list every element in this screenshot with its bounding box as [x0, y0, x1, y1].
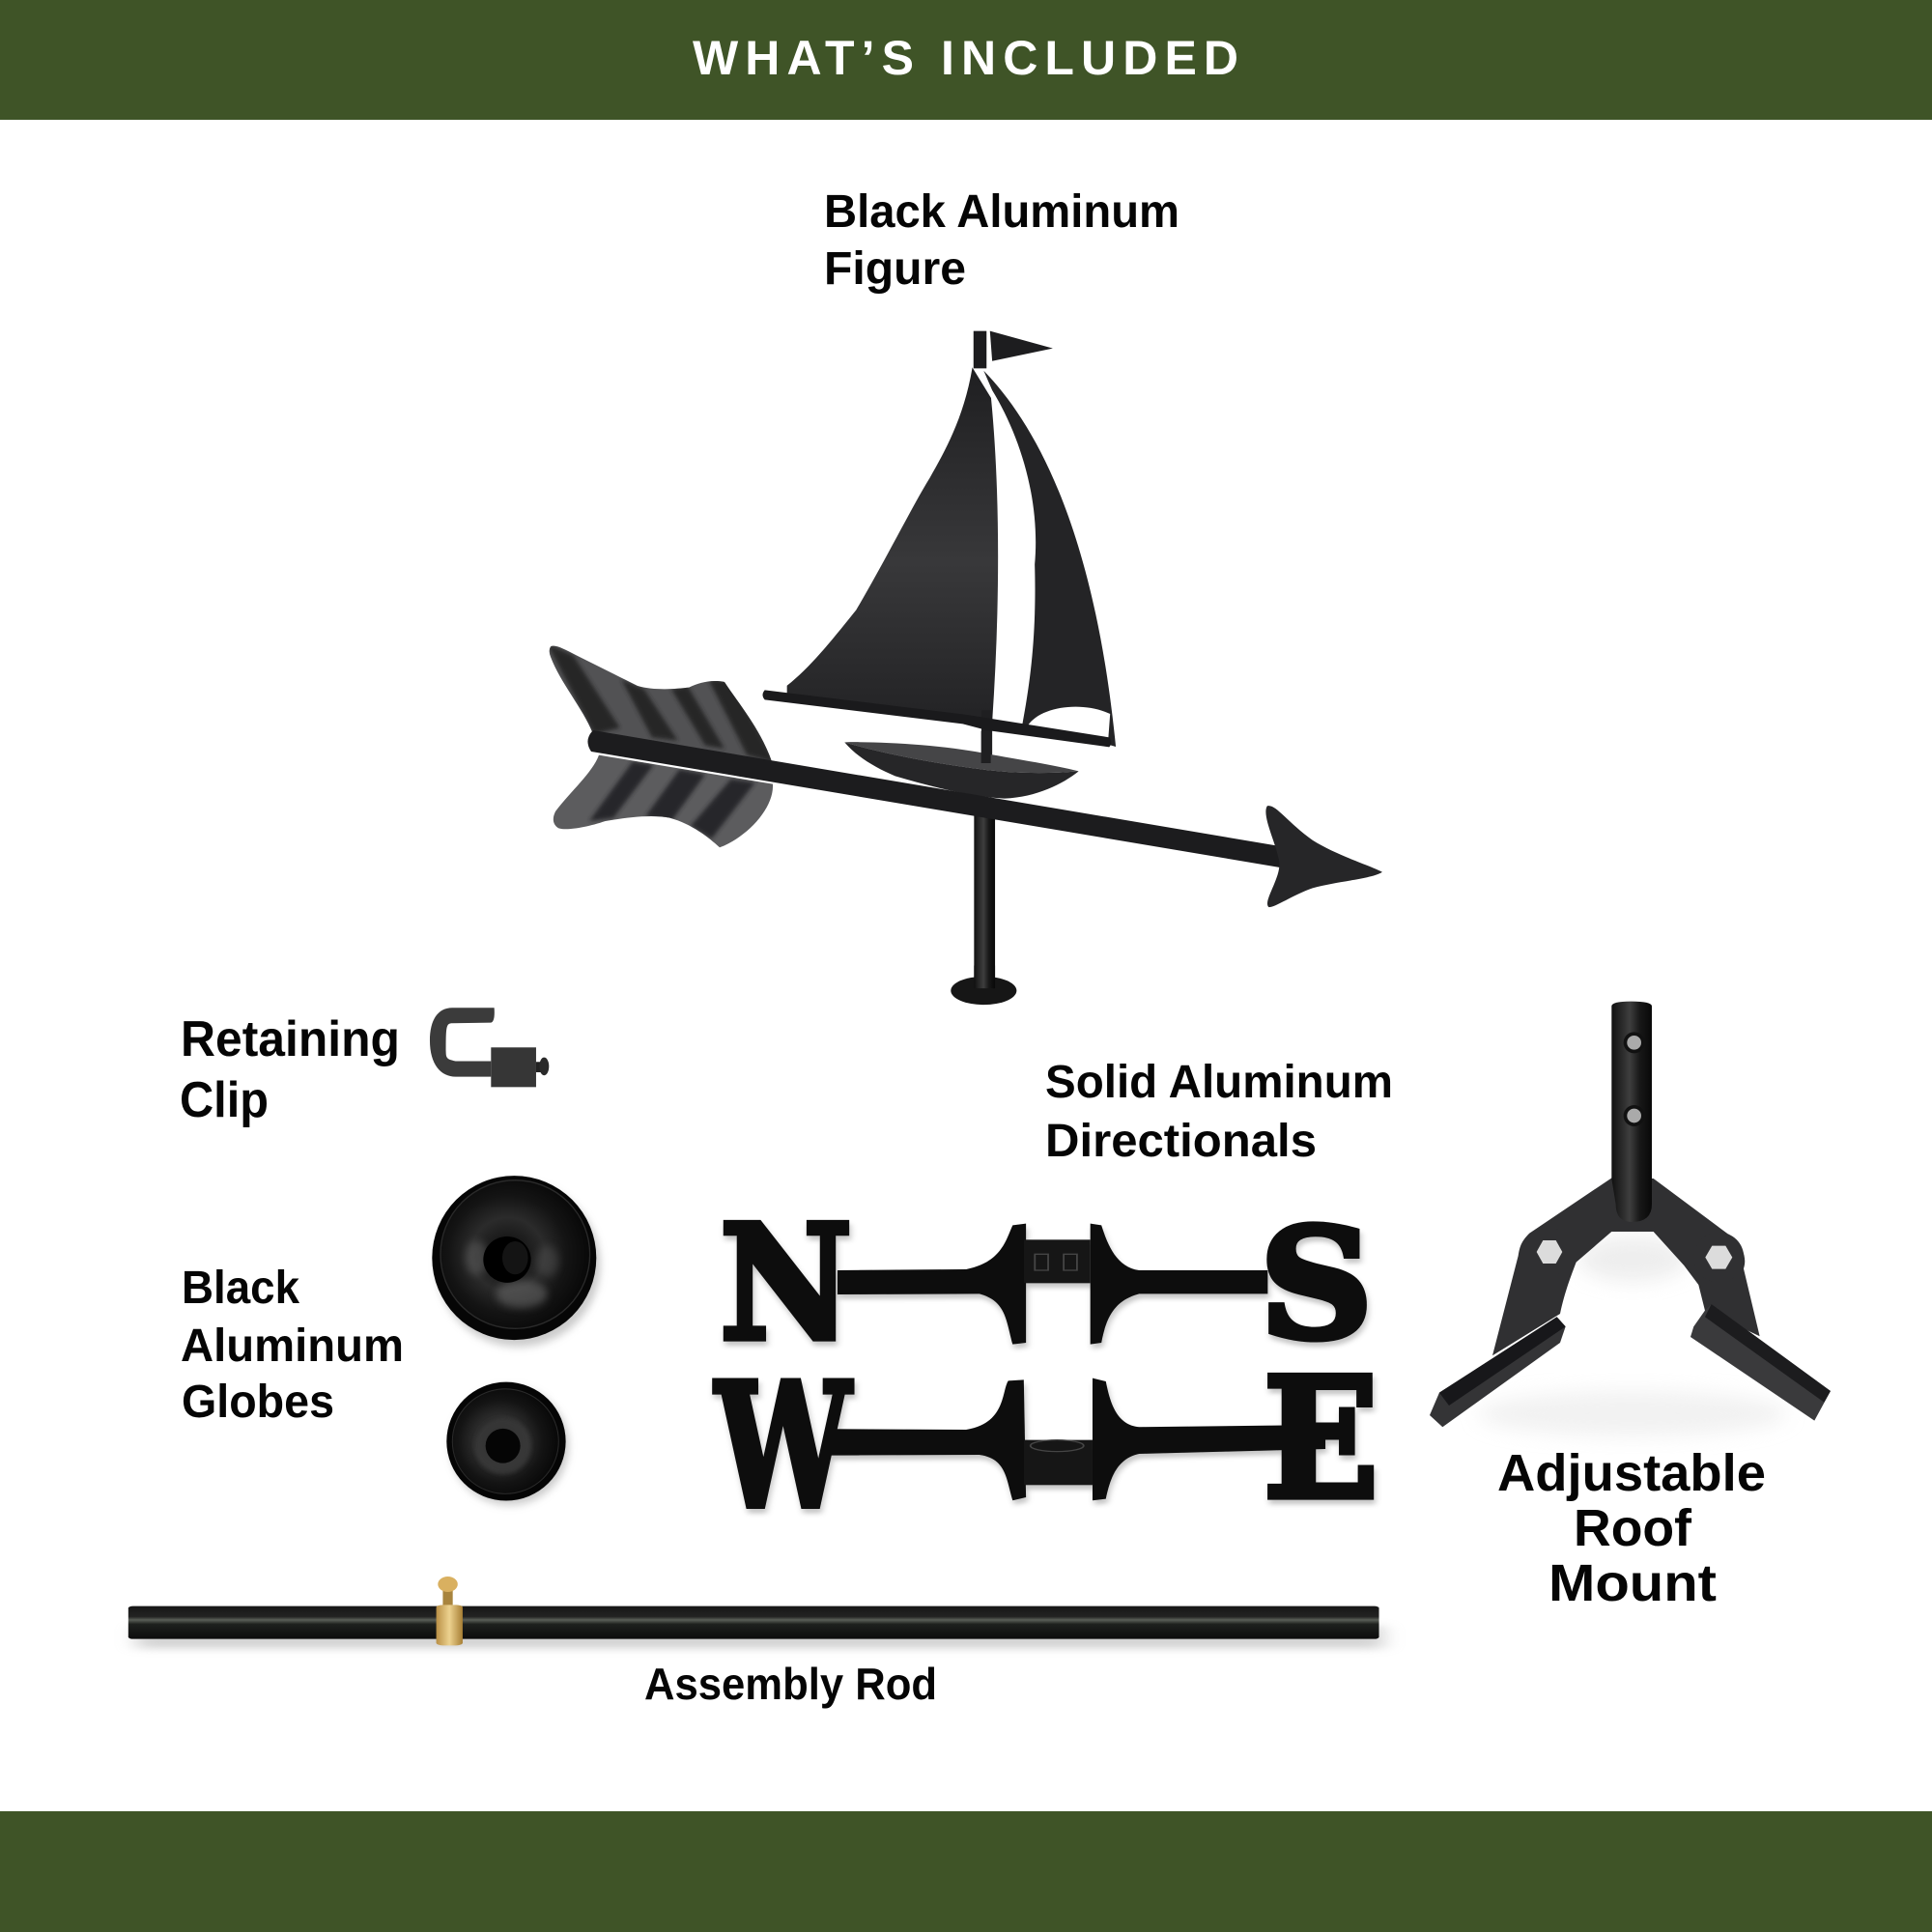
icon: north-south directional	[720, 1190, 1373, 1376]
jib sail	[983, 371, 1116, 747]
title: WHAT’S INCLUDED	[693, 31, 1238, 85]
mount left foot	[1430, 1317, 1566, 1427]
label: adjustable roof mount	[1497, 1444, 1766, 1612]
support post	[951, 810, 1016, 1005]
label: black aluminum globes: Aluminum	[181, 1321, 404, 1372]
label: adjustable roof mount: Adjustable	[1497, 1444, 1766, 1502]
mount stem	[1611, 1002, 1652, 1222]
label: black aluminum figure: Black Aluminum	[824, 186, 1179, 238]
mount right foot	[1690, 1304, 1831, 1421]
mainsail	[787, 367, 998, 722]
mount bracket arms	[1492, 1177, 1760, 1355]
letter N: N	[720, 1190, 852, 1376]
label: black aluminum globes: Globes	[182, 1377, 334, 1428]
header band	[0, 0, 1932, 120]
icon: sailboat weathervane figure	[548, 331, 1382, 1005]
mount shadow	[1478, 1236, 1787, 1436]
label: retaining clip	[180, 1011, 400, 1128]
label: adjustable roof mount: Roof	[1574, 1499, 1692, 1557]
label: solid aluminum directionals	[1045, 1057, 1393, 1167]
label: black aluminum figure	[824, 186, 1179, 295]
mount bolts	[1525, 1228, 1744, 1283]
mast lower	[981, 710, 992, 767]
icon: west-east directional	[714, 1341, 1378, 1547]
flag and mast top	[974, 331, 1053, 368]
label: adjustable roof mount: Mount	[1548, 1554, 1717, 1612]
icon: adjustable roof mount	[1430, 1002, 1831, 1436]
footer band	[0, 1811, 1932, 1932]
icon: assembly rod	[128, 1577, 1383, 1649]
icon: small globe	[446, 1382, 569, 1505]
boom	[762, 690, 1111, 747]
letter S: S	[1260, 1196, 1373, 1373]
label: black aluminum globes: Black	[182, 1263, 299, 1314]
arrow tail upper fletching	[548, 644, 776, 763]
label: assembly rod: Assembly Rod	[644, 1659, 937, 1709]
brass collar and knob	[437, 1577, 463, 1645]
hull	[844, 731, 1079, 799]
icon: retaining clip	[430, 1008, 549, 1087]
letter W: W	[714, 1346, 853, 1547]
arrow head	[1265, 806, 1382, 907]
label: black aluminum figure: Figure	[824, 243, 966, 295]
label: retaining clip: Clip	[180, 1072, 269, 1128]
label: solid aluminum directionals: Solid Aluminum	[1045, 1057, 1393, 1108]
arrow tail lower fletching	[554, 755, 773, 847]
arrow shaft	[587, 730, 1280, 867]
letter E: E	[1264, 1341, 1378, 1536]
label: retaining clip: Retaining	[181, 1011, 400, 1067]
label: solid aluminum directionals: Directionals	[1045, 1116, 1317, 1167]
label: black aluminum globes	[181, 1263, 404, 1428]
icon: large globe	[432, 1176, 601, 1347]
